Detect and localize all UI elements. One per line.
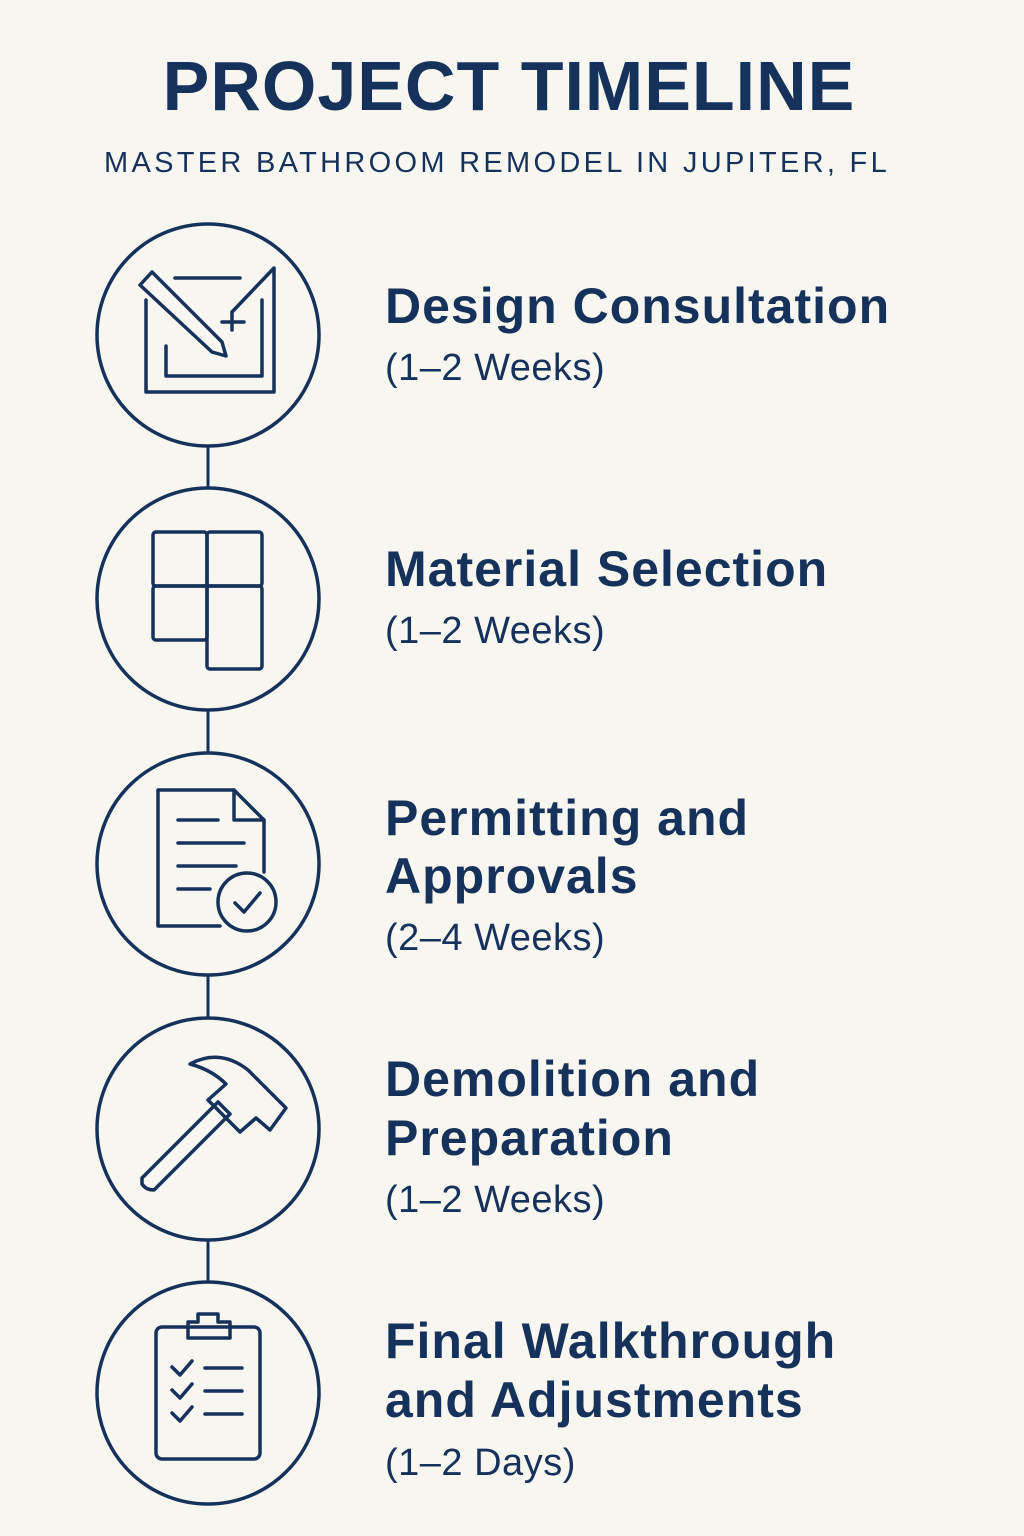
icon: clipboard <box>156 1314 260 1459</box>
step 5 text: (1–2 Days) <box>385 1442 576 1484</box>
step 2: material selection <box>97 488 319 710</box>
step 2 text: Material Selection <box>385 541 828 597</box>
step 4 text: Demolition and <box>385 1051 760 1107</box>
step 4 text: (1–2 Weeks) <box>385 1179 605 1221</box>
step 4: demolition <box>97 1018 319 1240</box>
icon: document check <box>158 790 276 931</box>
step 3 text: (2–4 Weeks) <box>385 917 605 959</box>
step 1 text <box>385 278 890 389</box>
connector line <box>206 446 210 1282</box>
step 4 text: Preparation <box>385 1110 674 1166</box>
step 1 text: Design Consultation <box>385 278 890 334</box>
subtitle: MASTER BATHROOM REMODEL IN JUPITER, FL <box>104 147 890 179</box>
step 2 text: (1–2 Weeks) <box>385 610 605 652</box>
title: PROJECT TIMELINE <box>163 47 855 125</box>
step 5: final walkthrough <box>97 1282 319 1504</box>
icon: hammer <box>142 1057 286 1190</box>
step 2 text <box>385 541 828 652</box>
step 5 text: and Adjustments <box>385 1372 804 1428</box>
icon: blueprint pencil <box>140 268 274 392</box>
step 5 text <box>385 1313 836 1484</box>
step 3 text: Approvals <box>385 848 639 904</box>
step 3 text <box>385 790 749 959</box>
step 4 text <box>385 1051 760 1221</box>
step 3 text: Permitting and <box>385 790 749 846</box>
step 1 text: (1–2 Weeks) <box>385 347 605 389</box>
step 1: design consultation <box>97 224 319 446</box>
step 3: permitting <box>97 753 319 975</box>
icon: tiles <box>153 532 262 669</box>
step 5 text: Final Walkthrough <box>385 1313 836 1369</box>
